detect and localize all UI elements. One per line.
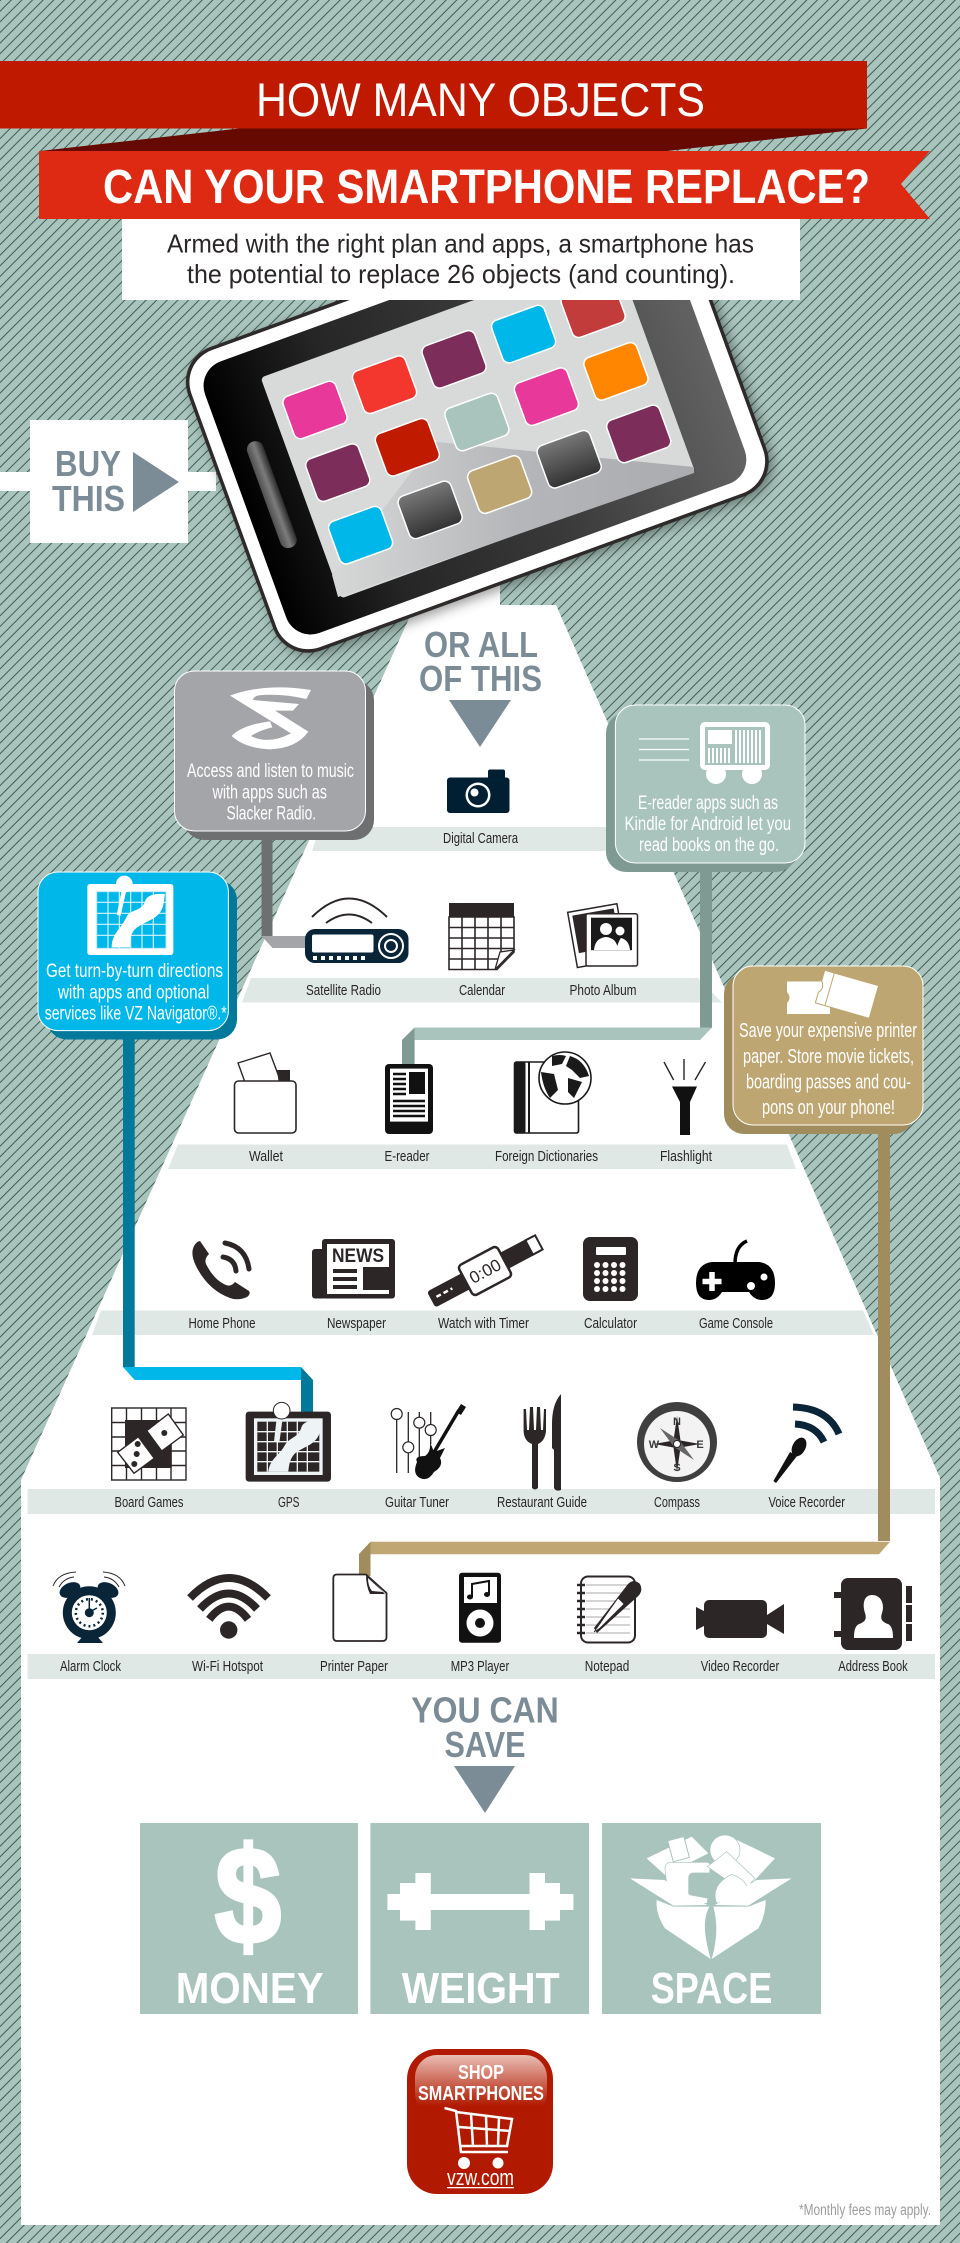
label: home phone: Home Phone — [188, 1315, 256, 1332]
label: address book: Address Book — [838, 1658, 908, 1675]
connector: GPS — [123, 1038, 313, 1413]
icon: wi-fi hotspot — [190, 1578, 268, 1639]
icon: map pin — [87, 876, 173, 955]
button: shop smartphones — [407, 2049, 553, 2194]
label band: row 1 — [312, 827, 668, 851]
icon: slacker logo — [230, 687, 311, 749]
icon: calendar — [449, 903, 514, 970]
button: shop smartphones: SHOP — [458, 2062, 504, 2084]
icon: newspaper — [312, 1239, 395, 1298]
label: video recorder: Video Recorder — [701, 1658, 779, 1675]
label: foreign dictionaries: Foreign Dictionaries — [495, 1148, 598, 1165]
label: watch with timer: Watch with Timer — [438, 1315, 529, 1332]
label: e-reader: E-reader — [384, 1148, 430, 1165]
icon: newspaper: NEWS — [332, 1246, 384, 1267]
icon: compass: N — [673, 1416, 681, 1428]
label: MP3 player: MP3 Player — [451, 1658, 509, 1675]
icon: foreign dictionaries — [514, 1052, 591, 1133]
icon: watch with timer: 0:00 — [466, 1255, 504, 1288]
heading: you can save: SAVE — [444, 1724, 526, 1765]
label band: row 5 — [28, 1489, 935, 1514]
connector: printer paper — [359, 1133, 890, 1576]
banner: can your smartphone replace: CAN YOUR SMARTPHONE REPLACE? — [103, 161, 870, 214]
icon: satellite radio — [305, 898, 408, 963]
label: calculator: Calculator — [584, 1315, 637, 1332]
label band: row 4 — [92, 1310, 874, 1335]
icon: flashlight — [664, 1059, 706, 1135]
callout: navigation — [38, 872, 237, 1040]
subtitle: Armed with the right plan and apps, a smartphone has — [167, 228, 754, 258]
callout text — [45, 961, 227, 1024]
subtitle — [122, 219, 800, 300]
icon: video recorder — [696, 1600, 784, 1638]
label: GPS: GPS — [278, 1494, 299, 1511]
icon: restaurant guide — [524, 1394, 561, 1491]
subtitle: the potential to replace 26 objects (and counting). — [187, 259, 735, 289]
callout text: Kindle for Android let you — [625, 814, 791, 835]
panel: money: MONEY — [176, 1964, 324, 2013]
heading: or all of this: OR ALL — [424, 624, 538, 665]
connector: satellite radio — [262, 838, 306, 948]
heading: you can save — [411, 1690, 559, 1765]
callout text: with apps and optional — [57, 982, 209, 1004]
panel: space: SPACE — [651, 1964, 772, 2013]
callout: slacker radio — [174, 671, 374, 840]
button: shop smartphones: SMARTPHONES — [418, 2083, 544, 2105]
heading: you can save: YOU CAN — [411, 1690, 559, 1730]
label: wallet: Wallet — [249, 1148, 284, 1165]
callout: e-reader apps — [606, 705, 805, 872]
icon: e-reader device — [639, 722, 770, 784]
label: flashlight: Flashlight — [660, 1148, 713, 1165]
icon: notepad — [577, 1576, 641, 1642]
icon: voice recorder — [773, 1407, 839, 1483]
label: wi-fi hotspot: Wi-Fi Hotspot — [192, 1658, 264, 1675]
panel: weight — [370, 1823, 589, 2014]
panel: space — [602, 1823, 821, 2014]
white pyramid panel — [21, 570, 940, 2225]
label: satellite radio: Satellite Radio — [306, 982, 381, 999]
callout: printer paper — [724, 966, 923, 1134]
callout text: Slacker Radio. — [227, 804, 316, 824]
icon: watch with timer — [423, 1227, 547, 1315]
label: compass: Compass — [654, 1494, 700, 1511]
label: newspaper: Newspaper — [327, 1315, 386, 1332]
icon: compass: W — [649, 1439, 660, 1451]
icon: home phone — [192, 1241, 250, 1299]
label: alarm clock: Alarm Clock — [60, 1658, 121, 1675]
icon: tickets — [787, 970, 879, 1018]
label band: row 2 — [242, 978, 722, 1002]
icon: MP3 player — [459, 1573, 501, 1643]
label: voice recorder: Voice Recorder — [768, 1494, 845, 1511]
callout text — [625, 793, 791, 856]
icon: board games — [112, 1408, 186, 1480]
buy this connector bar — [0, 472, 216, 491]
label: board games: Board Games — [114, 1494, 184, 1511]
label: calendar: Calendar — [459, 982, 505, 999]
panel: buy this — [30, 420, 188, 543]
icon: printer paper — [333, 1574, 386, 1641]
panel: weight: WEIGHT — [402, 1964, 560, 2013]
label: photo album: Photo Album — [570, 982, 636, 999]
label: printer paper: Printer Paper — [320, 1658, 388, 1675]
label band: row 3 — [168, 1144, 796, 1169]
icon: compass: E — [696, 1439, 704, 1451]
label: digital camera: Digital Camera — [443, 830, 518, 847]
heading: or all of this: OF THIS — [419, 658, 542, 699]
panel: money: $ — [215, 1820, 281, 1973]
icon: compass — [637, 1402, 717, 1482]
icon: GPS — [246, 1402, 331, 1482]
smartphone — [175, 180, 779, 663]
label: game console: Game Console — [699, 1315, 773, 1332]
icon: address book — [834, 1578, 912, 1650]
callout text: services like VZ Navigator®.* — [45, 1004, 227, 1024]
icon: calculator — [583, 1237, 638, 1301]
arrow: down — [454, 1766, 515, 1813]
label: guitar tuner: Guitar Tuner — [385, 1494, 449, 1511]
icon: photo album — [568, 904, 638, 968]
phone screen reflection — [332, 442, 694, 597]
arrow: down — [449, 700, 511, 747]
icon: digital camera — [447, 770, 510, 813]
app icon grid — [281, 278, 673, 566]
banner fold — [40, 128, 867, 151]
icon: open box — [630, 1835, 792, 1959]
callout text — [187, 761, 354, 824]
label band: row 6 — [28, 1654, 935, 1679]
callout text: with apps such as — [212, 782, 327, 804]
icon: shopping cart — [444, 2108, 512, 2169]
label: notepad: Notepad — [585, 1658, 629, 1675]
button: shop smartphones: vzw.com — [447, 2165, 514, 2190]
icon: compass: S — [673, 1462, 681, 1474]
callout text: Access and listen to music — [187, 761, 354, 782]
callout text: E-reader apps such as — [638, 793, 778, 814]
panel: buy this: BUY — [55, 443, 121, 484]
heading: or all of this — [419, 624, 542, 699]
icon: guitar tuner — [391, 1404, 466, 1479]
panel: buy this: THIS — [52, 478, 125, 519]
label: restaurant guide: Restaurant Guide — [497, 1494, 587, 1511]
banner: how many objects: HOW MANY OBJECTS — [256, 73, 705, 126]
icon: alarm clock — [53, 1572, 125, 1643]
banner: how many objects — [0, 61, 867, 128]
callout text: read books on the go. — [639, 835, 779, 856]
panel: money — [140, 1820, 358, 2014]
connector: e-reader — [402, 870, 712, 1064]
icon: e-reader — [385, 1064, 433, 1134]
icon: game console — [696, 1241, 775, 1300]
callout text: Get turn-by-turn directions — [46, 961, 223, 982]
callout text: pons on your phone! — [762, 1096, 895, 1119]
callout text — [739, 1019, 917, 1119]
icon: wallet — [234, 1053, 296, 1133]
